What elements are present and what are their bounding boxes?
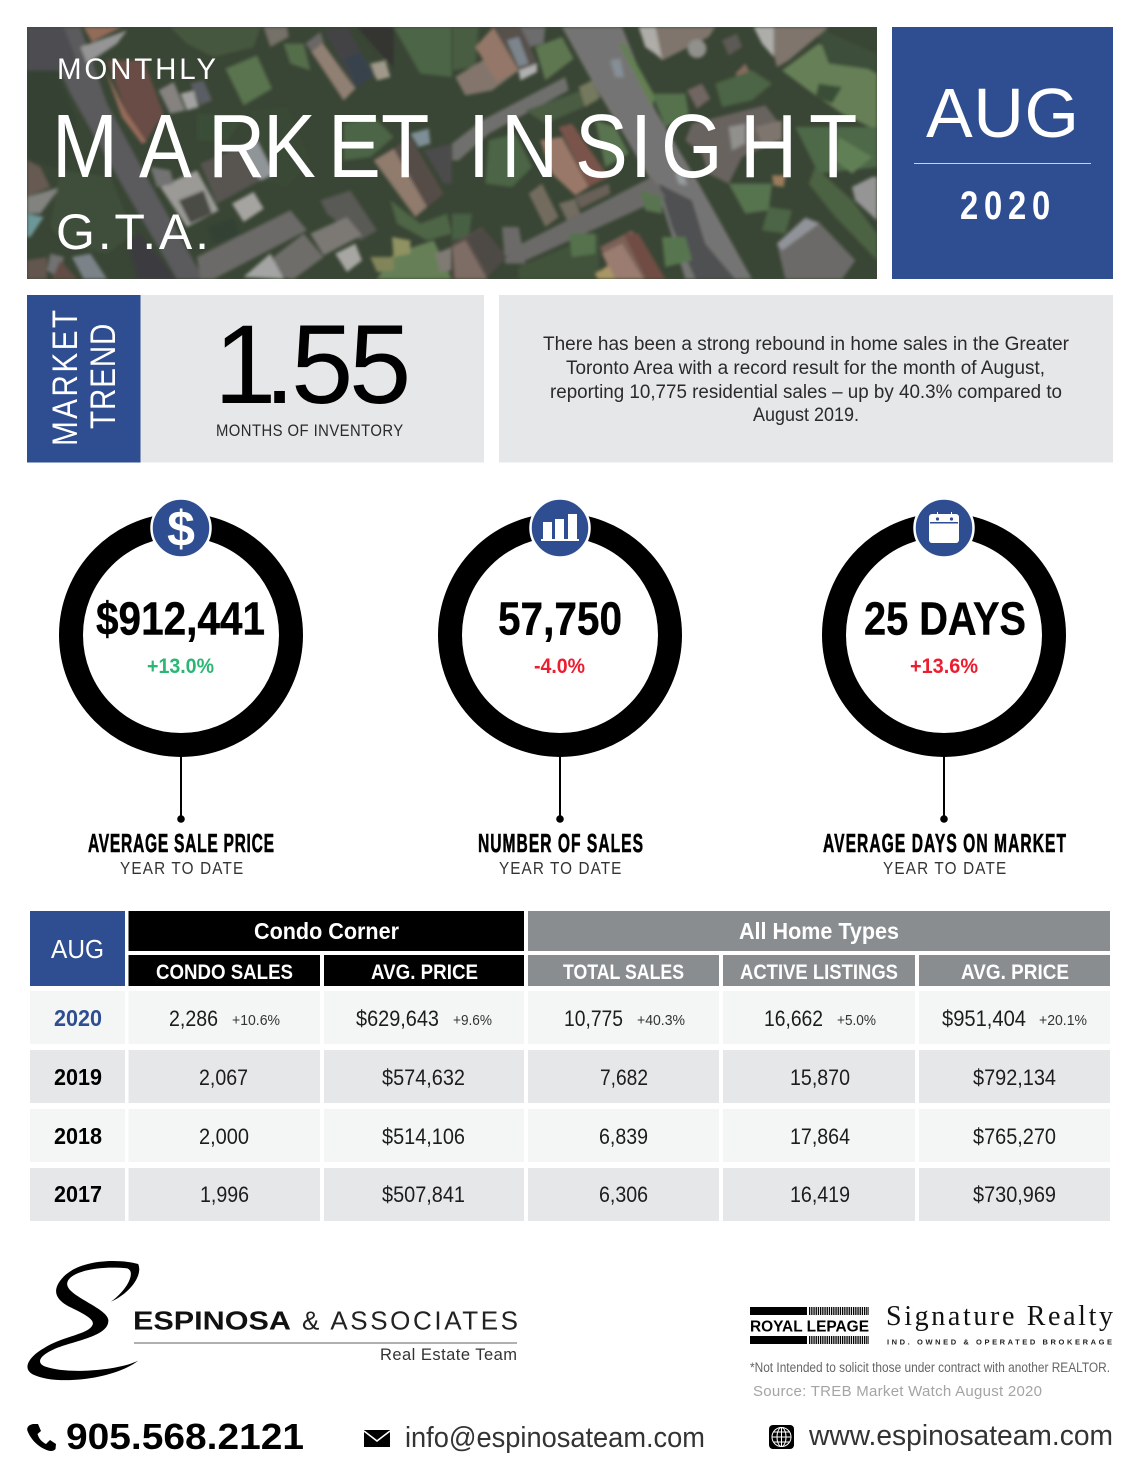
icon: dollar: $ bbox=[167, 501, 195, 557]
kpi: average sale price bbox=[71, 498, 291, 878]
table header: All Home Types bbox=[739, 918, 899, 944]
inventory caption: MONTHS OF INVENTORY bbox=[216, 422, 404, 440]
month: AUG bbox=[926, 74, 1079, 152]
inventory number: 1.55 bbox=[214, 302, 411, 427]
vertical heading: MARKET bbox=[46, 310, 85, 446]
icon: calendar bbox=[914, 498, 974, 558]
icon: script S bbox=[27, 1261, 139, 1380]
ring bbox=[450, 525, 670, 745]
value: $912,441 bbox=[96, 592, 265, 644]
table header: TOTAL SALES bbox=[563, 961, 684, 984]
row 2017: $507,841 bbox=[382, 1182, 465, 1207]
table header: CONDO SALES bbox=[156, 961, 293, 984]
company name: ESPINOSA bbox=[133, 1306, 291, 1336]
row 2020: 2,286 bbox=[169, 1006, 218, 1031]
row 2019: 2,067 bbox=[199, 1065, 248, 1090]
value: 25 DAYS bbox=[864, 592, 1026, 644]
royal lepage mark bbox=[750, 1307, 869, 1344]
panel: market summary text: August 2019. bbox=[753, 405, 859, 426]
royal lepage mark: ROYAL LEPAGE bbox=[750, 1318, 869, 1336]
row 2017: 1,996 bbox=[200, 1182, 249, 1207]
row 2020: +10.6% bbox=[232, 1013, 280, 1029]
row 2018: 2,000 bbox=[199, 1124, 249, 1149]
panel: market trend bbox=[27, 295, 484, 462]
panel: market summary text: There has been a strong rebound in home sales in the Greater bbox=[543, 334, 1070, 355]
row 2020: +40.3% bbox=[637, 1013, 685, 1029]
row 2020: +9.6% bbox=[453, 1013, 492, 1029]
connector bbox=[940, 757, 948, 823]
email contact: info@espinosateam.com bbox=[405, 1422, 705, 1454]
row 2017: 6,306 bbox=[599, 1182, 648, 1207]
table header: AUG bbox=[51, 934, 104, 964]
hero banner: aerial photo with title bbox=[27, 27, 877, 279]
source: Source: TREB Market Watch August 2020 bbox=[753, 1383, 1042, 1400]
row 2018: $514,106 bbox=[382, 1124, 465, 1149]
row 2018 bbox=[30, 1109, 1110, 1162]
row 2019 bbox=[30, 1050, 1110, 1103]
row 2019: $792,134 bbox=[973, 1065, 1056, 1090]
monthly label: MONTHLY bbox=[57, 53, 216, 86]
change: +13.6% bbox=[910, 655, 978, 678]
row 2020: 2020 bbox=[54, 1005, 102, 1031]
change: -4.0% bbox=[534, 655, 585, 678]
panel: market summary text bbox=[499, 295, 1113, 462]
panel: market summary text: reporting 10,775 residential sales – up by 40.3% compared to bbox=[550, 382, 1062, 403]
row 2018: 6,839 bbox=[599, 1124, 648, 1149]
icon: globe bbox=[769, 1425, 794, 1449]
sublabel: YEAR TO DATE bbox=[120, 858, 243, 878]
row 2017: 2017 bbox=[54, 1181, 102, 1207]
row 2020: 10,775 bbox=[564, 1006, 623, 1031]
value: 57,750 bbox=[498, 592, 622, 644]
sublabel: YEAR TO DATE bbox=[883, 858, 1006, 878]
table header: AVG. PRICE bbox=[961, 961, 1069, 984]
panel: market summary text: Toronto Area with a record result for the month of August, bbox=[566, 358, 1045, 379]
change: +13.0% bbox=[147, 655, 214, 678]
data table bbox=[30, 911, 1110, 1221]
connector bbox=[556, 757, 564, 823]
row 2020: +20.1% bbox=[1039, 1013, 1087, 1029]
row 2017 bbox=[30, 1168, 1110, 1221]
row 2020 bbox=[30, 991, 1110, 1044]
sublabel: YEAR TO DATE bbox=[499, 858, 621, 878]
icon: envelope bbox=[364, 1430, 390, 1447]
label: AVERAGE SALE PRICE bbox=[88, 829, 274, 858]
row 2017: 16,419 bbox=[790, 1182, 850, 1207]
connector bbox=[177, 757, 185, 823]
icon: dollar bbox=[152, 498, 210, 558]
table header: Condo Corner bbox=[254, 918, 399, 944]
row 2020: 16,662 bbox=[764, 1006, 823, 1031]
signature realty: Signature Realty bbox=[886, 1301, 1113, 1332]
date panel bbox=[892, 27, 1113, 279]
row 2019: $574,632 bbox=[382, 1065, 465, 1090]
phone contact: 905.568.2121 bbox=[66, 1416, 304, 1457]
kpi: number of sales bbox=[450, 498, 670, 878]
icon: phone bbox=[27, 1424, 56, 1451]
row 2018: 17,864 bbox=[790, 1124, 850, 1149]
table header: ACTIVE LISTINGS bbox=[740, 961, 898, 984]
vertical heading: TREND bbox=[84, 324, 123, 429]
table header: AVG. PRICE bbox=[371, 961, 478, 984]
ring bbox=[71, 525, 291, 745]
ring bbox=[834, 525, 1054, 745]
main title: MARKET INSIGHT bbox=[52, 95, 857, 196]
row 2020: +5.0% bbox=[837, 1013, 876, 1029]
brokerage logo bbox=[750, 1301, 1113, 1346]
kpi: average days on market bbox=[823, 498, 1066, 878]
row 2018: 2018 bbox=[54, 1123, 102, 1149]
row 2019: 7,682 bbox=[600, 1065, 648, 1090]
year: 2020 bbox=[960, 183, 1050, 228]
label: NUMBER OF SALES bbox=[478, 829, 643, 858]
company name: & ASSOCIATES bbox=[302, 1306, 518, 1336]
label: AVERAGE DAYS ON MARKET bbox=[823, 829, 1066, 858]
row 2020: $951,404 bbox=[942, 1006, 1026, 1031]
vertical heading bbox=[46, 310, 123, 446]
row 2018: $765,270 bbox=[973, 1124, 1056, 1149]
region label: G.T.A. bbox=[56, 204, 209, 260]
icon: bar chart bbox=[530, 498, 590, 558]
brokerage line: IND. OWNED & OPERATED BROKERAGE bbox=[887, 1338, 1112, 1346]
row 2020: $629,643 bbox=[356, 1006, 439, 1031]
website contact: www.espinosateam.com bbox=[808, 1420, 1113, 1452]
team logo bbox=[27, 1261, 518, 1380]
company name bbox=[133, 1306, 518, 1336]
table header bbox=[30, 911, 1110, 986]
aerial neighbourhood photo bbox=[27, 27, 877, 279]
row 2019: 2019 bbox=[54, 1064, 102, 1090]
row 2019: 15,870 bbox=[790, 1065, 850, 1090]
tagline: Real Estate Team bbox=[380, 1346, 517, 1364]
row 2017: $730,969 bbox=[973, 1182, 1056, 1207]
